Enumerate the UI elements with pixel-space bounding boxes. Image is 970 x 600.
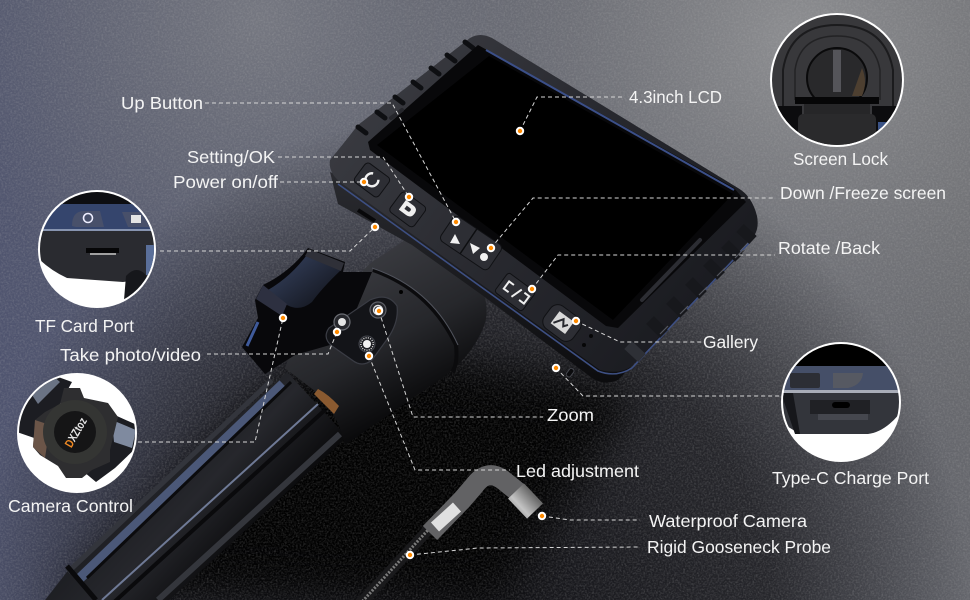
power button bbox=[353, 161, 391, 199]
leader line: power on/off bbox=[280, 181, 364, 183]
leader line: camera control bbox=[138, 318, 283, 442]
label: zoom: Zoom bbox=[547, 405, 594, 425]
side ribs bbox=[628, 228, 753, 358]
rigid gooseneck probe bbox=[360, 475, 535, 600]
unit front bezel bbox=[330, 35, 758, 372]
screen unit bbox=[330, 35, 758, 383]
side slot bbox=[642, 240, 700, 300]
top ribs bbox=[358, 42, 473, 133]
leader line: 4.3inch LCD bbox=[520, 97, 623, 131]
leader line: setting/OK bbox=[278, 157, 409, 197]
leader line: LED adjustment bbox=[369, 356, 510, 470]
leader line: waterproof camera bbox=[542, 516, 640, 520]
handle grip bbox=[42, 372, 347, 600]
indicator holes bbox=[582, 334, 593, 347]
label: 4.3inch LCD: 4.3inch LCD bbox=[629, 87, 722, 107]
inspection camera bbox=[42, 35, 758, 600]
button: zoom bbox=[370, 302, 386, 318]
callout: type-c charge port detail bbox=[781, 342, 901, 462]
inner rim bbox=[368, 45, 746, 328]
control plate bbox=[326, 297, 397, 364]
leader line: gallery bbox=[576, 321, 702, 342]
handle collar bbox=[285, 234, 487, 445]
leader line: rotate/back bbox=[532, 255, 775, 289]
gallery button bbox=[539, 301, 585, 345]
label: power on/off: Power on/off bbox=[173, 172, 278, 192]
type-c slot bbox=[565, 368, 575, 378]
unit side wall bbox=[330, 172, 745, 383]
leader line: down/freeze screen bbox=[491, 198, 775, 248]
label: rigid gooseneck probe: Rigid Gooseneck Probe bbox=[647, 537, 831, 557]
focus knob bbox=[242, 248, 372, 374]
tf slot bbox=[358, 210, 375, 221]
label: type-c charge port: Type-C Charge Port bbox=[772, 468, 929, 488]
label: gallery: Gallery bbox=[703, 332, 758, 352]
leader line: type-c port bbox=[556, 368, 780, 396]
leader line: TF card port bbox=[160, 227, 375, 251]
label: TF card port: TF Card Port bbox=[35, 316, 134, 336]
up and down button bbox=[439, 214, 503, 272]
label: down/freeze screen: Down /Freeze screen bbox=[780, 183, 946, 203]
rotate back button bbox=[494, 272, 536, 312]
button: LED bbox=[359, 336, 375, 352]
leader line: zoom bbox=[379, 311, 543, 417]
up slot bbox=[391, 110, 402, 118]
hotspot markers bbox=[280, 128, 579, 558]
label: setting/OK: Setting/OK bbox=[187, 147, 275, 167]
leader line: up button bbox=[205, 103, 456, 222]
label: up button: Up Button bbox=[121, 93, 203, 113]
callout: TF card port detail bbox=[38, 190, 156, 308]
leader line: gooseneck probe bbox=[410, 547, 640, 555]
label: waterproof camera: Waterproof Camera bbox=[649, 511, 807, 531]
label: rotate/back: Rotate /Back bbox=[778, 238, 880, 258]
callout: camera control knob detail bbox=[17, 373, 137, 493]
callout: camera control knob detail: DXZtoz bbox=[62, 415, 90, 450]
label: take photo/video: Take photo/video bbox=[60, 345, 201, 365]
label: camera control: Camera Control bbox=[8, 496, 133, 516]
leader line: take photo/video bbox=[207, 332, 337, 354]
callout: screen lock detail bbox=[770, 13, 904, 150]
LCD screen bbox=[377, 56, 733, 320]
label: LED adjustment: Led adjustment bbox=[516, 461, 639, 481]
setting button bbox=[388, 190, 427, 228]
label: screen lock: Screen Lock bbox=[793, 149, 888, 169]
button: take photo bbox=[334, 314, 350, 330]
